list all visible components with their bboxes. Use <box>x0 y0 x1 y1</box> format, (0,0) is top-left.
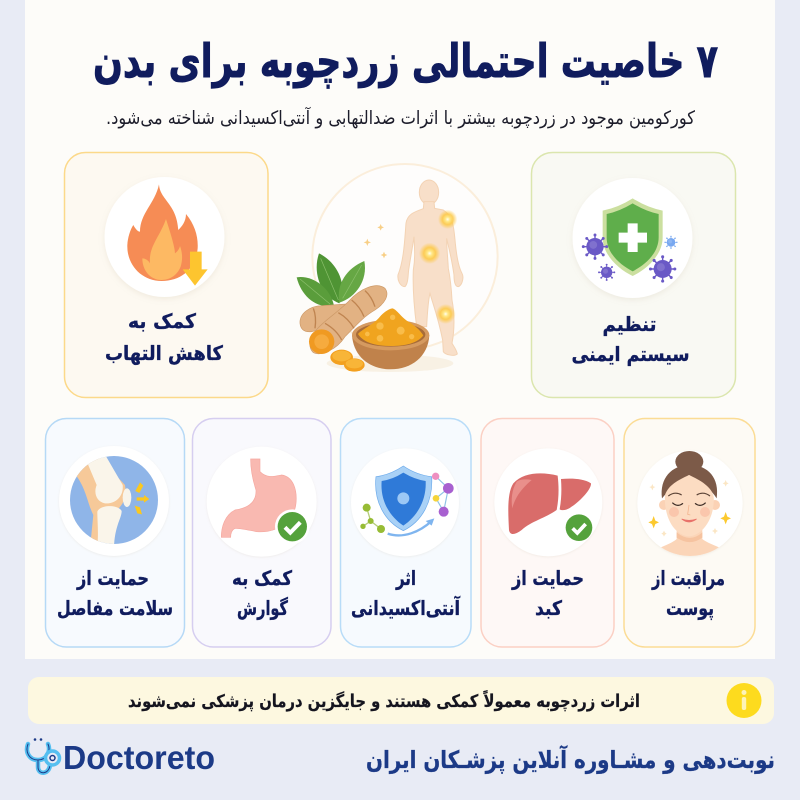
icon: flame with down arrow <box>127 184 208 286</box>
illustration: turmeric and body <box>297 164 498 372</box>
callout: note <box>28 677 774 724</box>
icon: info <box>726 683 762 718</box>
panel: inflammation <box>64 152 268 398</box>
sparkles <box>364 224 387 258</box>
label: liver support <box>511 566 584 620</box>
label: joint health: سلامت مفاصل <box>57 596 173 620</box>
icon: stomach with check <box>207 447 317 557</box>
label: immune regulation: تنظیم <box>602 312 656 336</box>
icon: turmeric root <box>300 286 387 372</box>
wordmark: Doctoreto <box>63 739 215 776</box>
icon: woman's face <box>637 451 743 562</box>
label: skin care: پوست <box>666 596 714 621</box>
label: digestion: گوارش <box>237 596 288 620</box>
label: antioxidant effect: اثر <box>395 566 416 590</box>
logo: Doctoreto <box>27 738 215 776</box>
main panel <box>25 0 775 659</box>
label: reduce inflammation: کاهش التهاب <box>105 341 223 365</box>
panel: joints <box>46 418 184 647</box>
icon: shield and molecules <box>351 448 459 556</box>
label: reduce inflammation: کمک به <box>128 309 196 333</box>
panel: digestion <box>192 418 331 647</box>
label: skin care <box>651 566 725 621</box>
label: joint health <box>57 566 173 620</box>
label: liver support: حمایت از <box>511 566 584 590</box>
icon: stethoscope <box>27 738 60 773</box>
icon: knee joint <box>59 446 169 556</box>
ring <box>312 164 498 349</box>
icon: shield with viruses <box>582 198 678 283</box>
label: antioxidant effect <box>351 566 461 620</box>
label: joint health: حمایت از <box>76 566 149 590</box>
label: antioxidant effect: آنتی‌اکسیدانی <box>351 595 461 620</box>
label: digestion: کمک به <box>232 566 292 590</box>
label: immune regulation <box>572 312 690 366</box>
panel: antioxidant <box>340 418 471 647</box>
icon: leaves <box>297 253 365 306</box>
ground shadow <box>327 355 453 372</box>
panel: immune system <box>532 152 736 398</box>
label: immune regulation: سیستم ایمنی <box>572 342 690 366</box>
icon: bowl of turmeric powder <box>352 308 429 369</box>
pain glows <box>419 210 457 324</box>
label: digestion <box>232 566 292 620</box>
label: skin care: مراقبت از <box>651 566 725 590</box>
note text: اثرات زردچوبه معمولاً کمکی هستند و جایگزین درمان پزشکی نمی‌شوند <box>128 689 640 712</box>
panel: liver <box>481 418 614 647</box>
icon: human body <box>398 180 463 355</box>
label: liver support: کبد <box>535 596 562 620</box>
icon: liver with check <box>494 448 602 556</box>
label: reduce inflammation <box>105 309 223 365</box>
subtitle: کورکومین موجود در زردچوبه بیشتر با اثرات ضدالتهابی و آنتی‌اکسیدانی شناخته می‌شود. <box>106 106 695 129</box>
panel: skin <box>624 418 755 647</box>
